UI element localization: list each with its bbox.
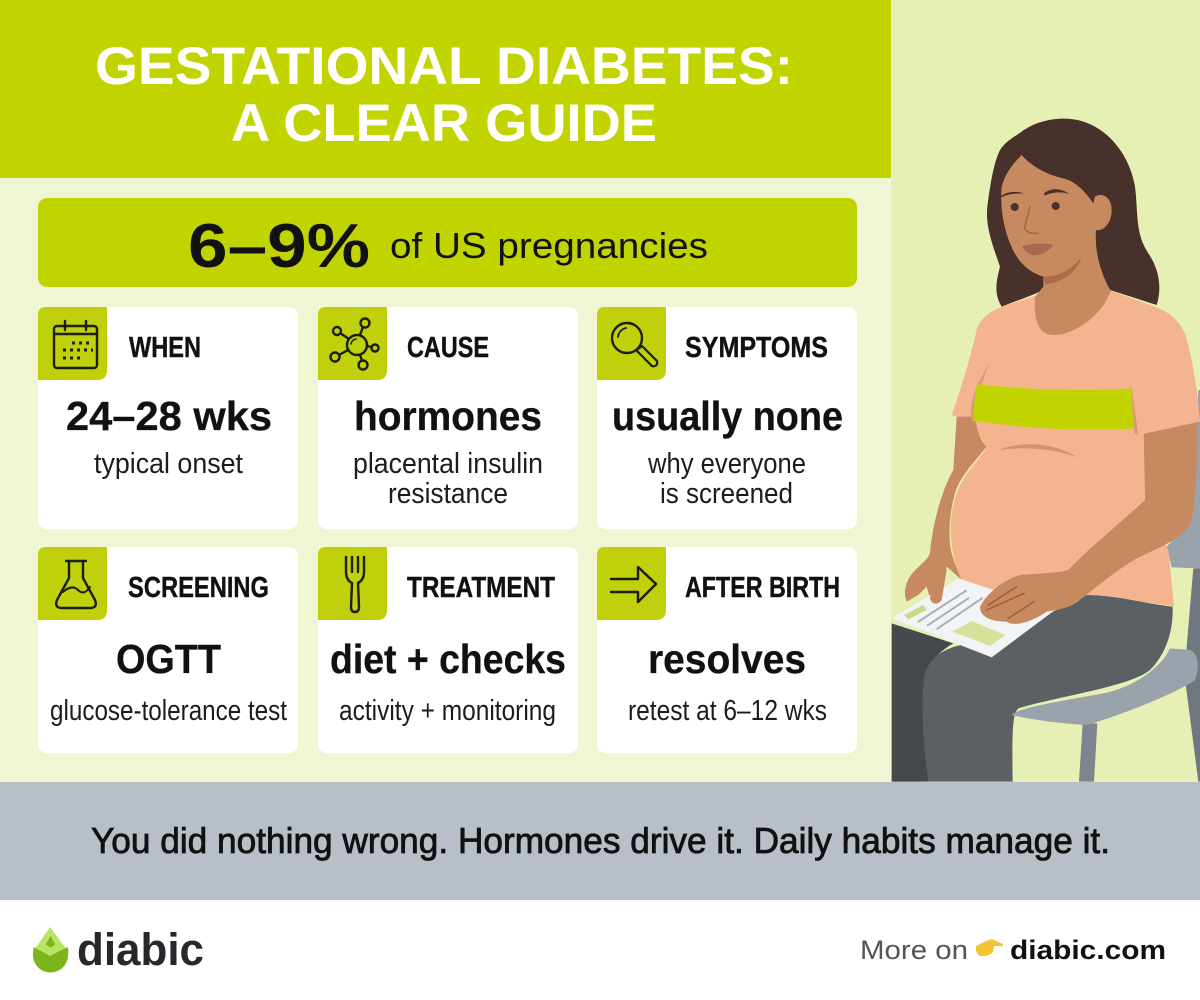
icon: arrow [611,567,656,602]
icon: molecule [330,318,378,370]
logo: diabic: diabic [77,924,204,975]
icon: magnifier [612,323,657,366]
value: resolves: resolves [648,636,806,682]
panel: treatment [318,547,578,753]
title: A CLEAR GUIDE [231,94,657,153]
message band [0,782,1200,900]
stat banner: 6–9% of US pregnancies: 6–9% [188,212,370,281]
note: why everyone is screened: is screened [660,478,793,510]
stat banner: 6–9% of US pregnancies [38,198,857,287]
panel: cause [318,307,578,529]
panel: after birth [597,547,857,753]
skin: face, neck, ear [1001,155,1112,335]
value: diet + checks: diet + checks [330,636,566,682]
illustration: seated pregnant woman [892,119,1200,782]
note: placental insulin resistance [353,448,543,510]
note: why everyone is screened: why everyone [647,448,806,480]
note: placental insulin resistance: resistance [388,478,508,510]
label: symptoms: SYMPTOMS [685,332,828,364]
message band: You did nothing wrong. Hormones drive it. Daily habits manage it. [91,820,1110,861]
note: glucose-tolerance test: glucose-tolerance test [50,695,287,727]
value: 24–28 wks: 24–28 wks [66,393,272,439]
document on lap [892,567,1055,657]
hair [987,119,1159,307]
label: when: WHEN [129,332,201,364]
note: why everyone is screened [647,448,806,510]
right arm and hand [980,417,1198,624]
icon: calendar [54,321,97,368]
t-shirt [951,291,1200,606]
label: treatment: TREATMENT [407,572,555,604]
value: hormones: hormones [354,393,542,439]
label: screening: SCREENING [128,572,269,604]
note: retest at 6–12 wks: retest at 6–12 wks [628,695,827,727]
panel: symptoms [597,307,857,529]
note: typical onset: typical onset [94,448,243,480]
title [0,0,891,178]
label: cause: CAUSE [407,332,489,364]
panel: screening [38,547,298,753]
chair [1079,390,1200,782]
link: more on diabic.com: More on [860,935,968,965]
link: more on diabic.com: diabic.com [1010,935,1166,965]
stat banner: 6–9% of US pregnancies: of US pregnancies [390,225,708,266]
left arm [905,417,987,604]
title: GESTATIONAL DIABETES: [95,37,793,96]
value: OGTT: OGTT [116,636,221,682]
icon: drop [33,927,68,972]
icon: pointing hand [976,939,1003,956]
note: activity + monitoring: activity + monitoring [339,695,556,727]
value: usually none: usually none [612,393,843,439]
icon: fork [346,557,364,612]
link: more on diabic.com [860,935,1166,965]
facial features [1001,189,1082,284]
shirt sleeve and stripe [971,333,1200,457]
trousers [892,595,1198,782]
label: after birth: AFTER BIRTH [685,572,840,604]
panel: when [38,307,298,529]
note: placental insulin resistance: placental insulin [353,448,543,480]
icon: flask [56,561,96,608]
